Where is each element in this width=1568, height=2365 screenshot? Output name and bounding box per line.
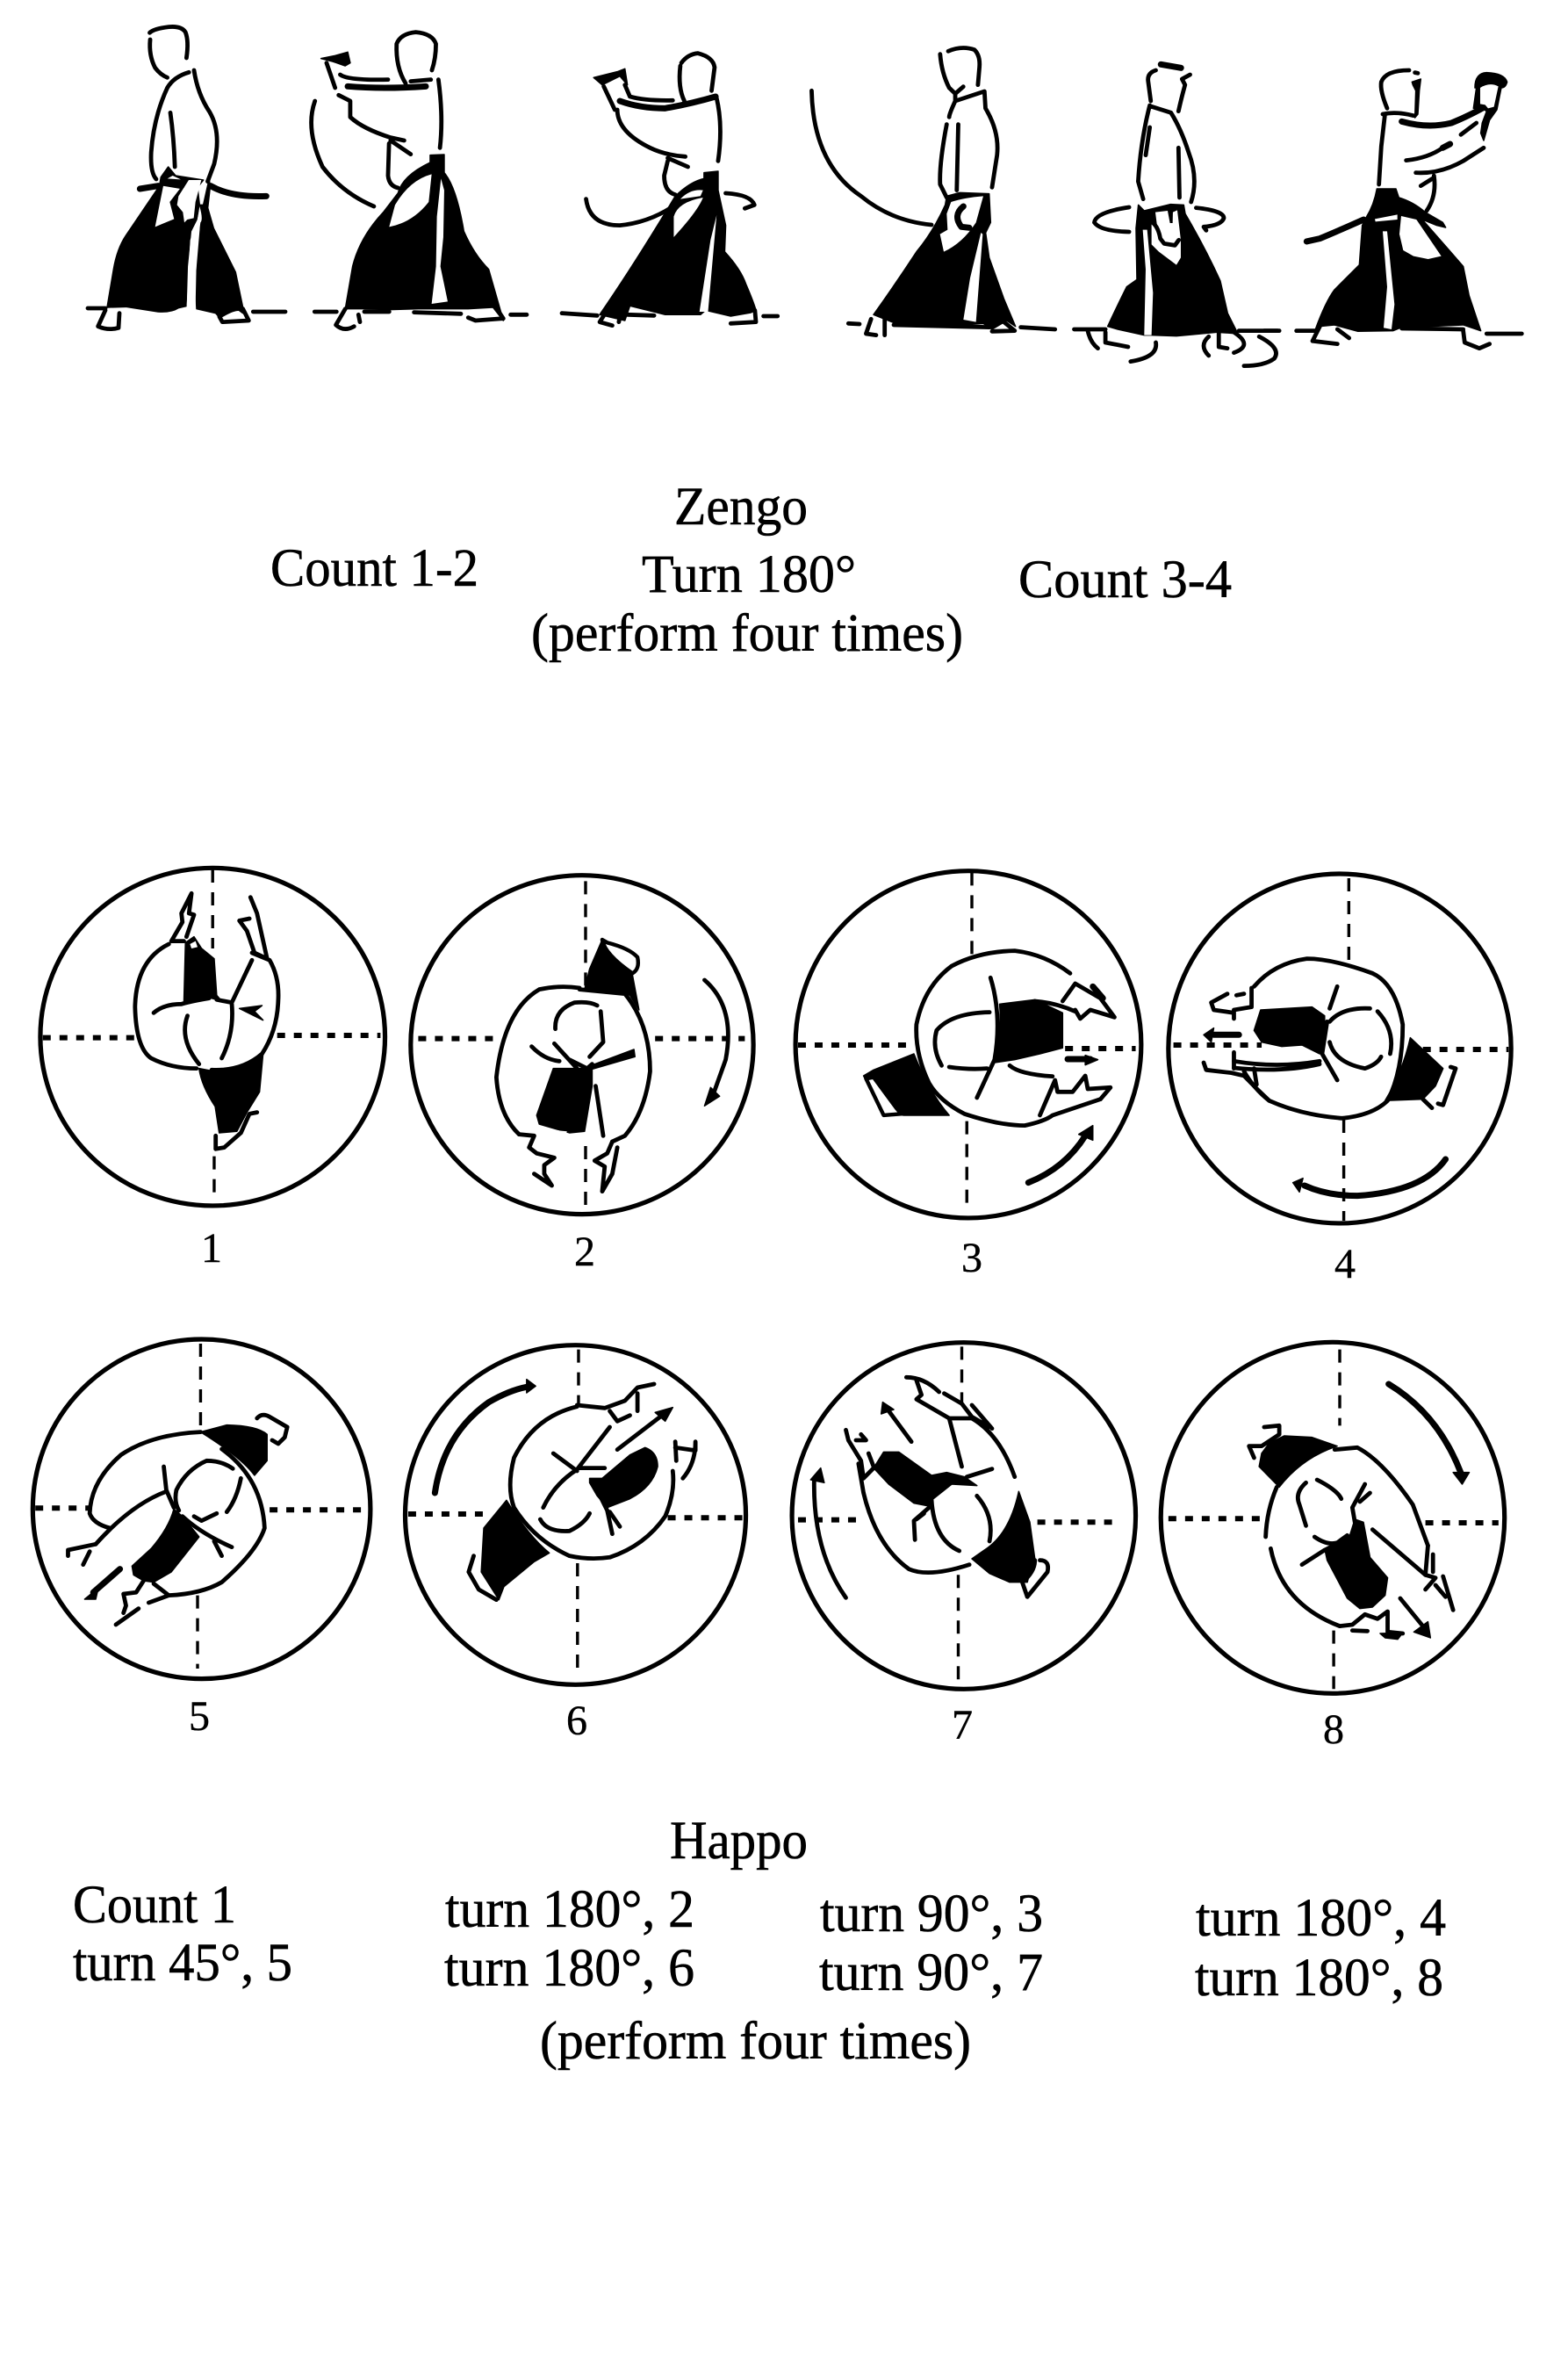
diagram 8: top view with arrow downward right — [1161, 1342, 1505, 1753]
figure 5: profile with rotation arrows around hips — [1075, 64, 1279, 366]
diagram 7: top view with arrow upward left — [792, 1343, 1136, 1749]
number 7: 7 — [952, 1702, 973, 1749]
caption: turn 180, 4: turn 180°, 4 — [1196, 1889, 1446, 1948]
diagram 3: top view turned 90 degrees — [795, 871, 1141, 1281]
figure 3: turning with hands raised — [562, 54, 778, 326]
figure 1: standing, sword lowered — [88, 26, 285, 329]
diagram 5: top view turned 45 degrees — [32, 1339, 370, 1740]
number 1: 1 — [201, 1225, 222, 1272]
number 2: 2 — [574, 1229, 595, 1275]
caption: Count 1: Count 1 — [73, 1876, 236, 1935]
number 4: 4 — [1334, 1241, 1356, 1287]
caption: turn 90, 3: turn 90°, 3 — [820, 1885, 1043, 1943]
diagram 6: top view with arrow upward right — [405, 1345, 746, 1744]
heading: Zengo: Zengo — [674, 478, 808, 537]
number 8: 8 — [1323, 1706, 1344, 1753]
caption: Count 3-4: Count 3-4 — [1018, 551, 1232, 609]
figure 2: hands raised with arc — [312, 32, 527, 329]
caption: turn 180, 6: turn 180°, 6 — [444, 1939, 694, 1998]
number 3: 3 — [961, 1235, 982, 1281]
number 5: 5 — [189, 1693, 210, 1740]
caption: turn 90, 7: turn 90°, 7 — [819, 1943, 1043, 2002]
caption: turn 45, 5: turn 45°, 5 — [73, 1934, 292, 1993]
heading: Happo: Happo — [670, 1812, 808, 1871]
figure row: zengo standing poses — [88, 26, 1521, 366]
diagram 4: top view facing left — [1169, 874, 1511, 1287]
diagram 1: top view in circle — [40, 868, 385, 1272]
caption: perform four times: (perform four times) — [531, 604, 963, 663]
caption: turn 180, 8: turn 180°, 8 — [1195, 1949, 1443, 2008]
caption: turn 180, 2: turn 180°, 2 — [445, 1880, 694, 1939]
figure 6: hands raised after turn — [1264, 70, 1521, 349]
caption: perform four times: (perform four times) — [540, 2012, 971, 2071]
diagram 2: top view with clockwise arrow — [411, 876, 753, 1275]
caption: Count 1-2: Count 1-2 — [270, 539, 478, 598]
caption: Turn 180: Turn 180° — [642, 545, 856, 604]
figure 4: facing left, long arc — [811, 48, 1055, 335]
number 6: 6 — [566, 1698, 587, 1744]
